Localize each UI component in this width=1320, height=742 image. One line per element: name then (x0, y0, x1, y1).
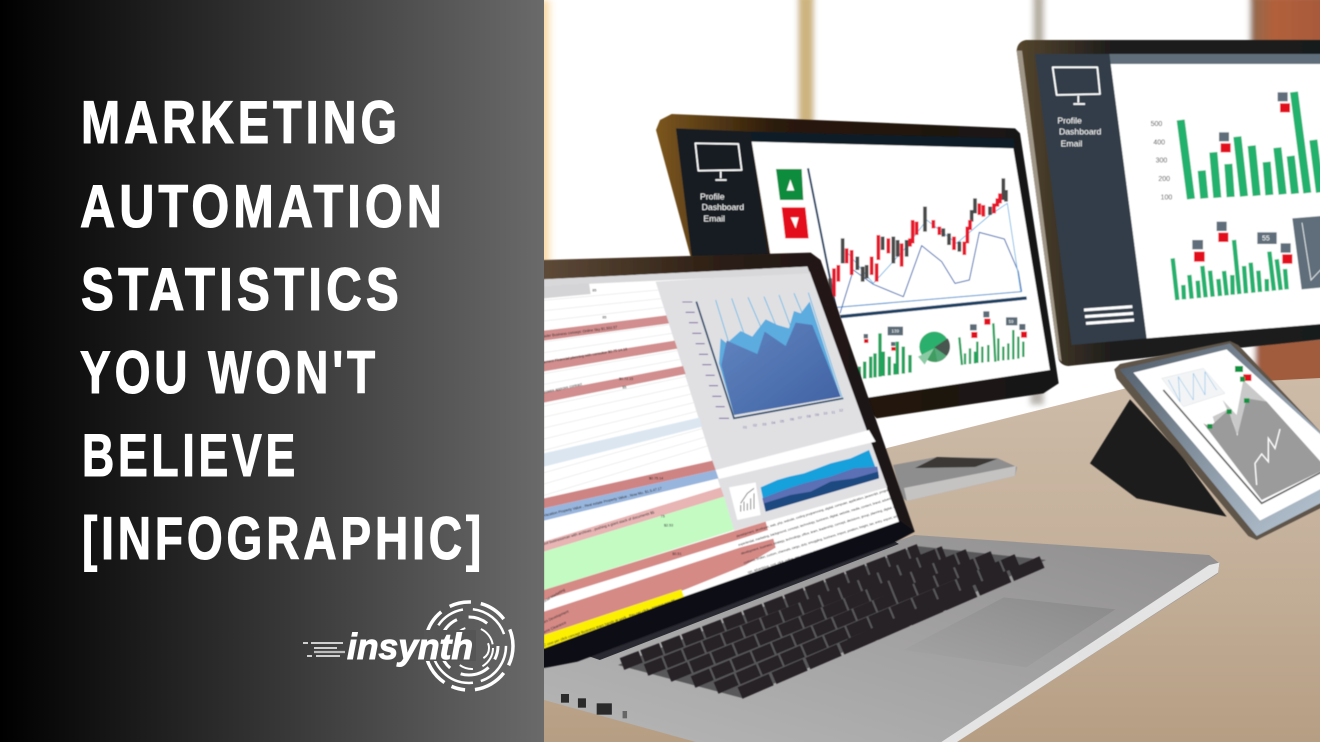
tablet stand (1090, 399, 1227, 517)
tablet tags (1207, 366, 1251, 429)
ports (561, 694, 627, 718)
icon: hamburger lines (1084, 307, 1134, 323)
grey and red tags (1192, 92, 1292, 264)
logo concentric rings (425, 602, 513, 690)
desk surface (544, 378, 1320, 742)
lower green bar chart (1173, 240, 1287, 300)
front edge highlight (941, 563, 1219, 742)
pie chart (918, 332, 950, 365)
phone lying on desk (893, 457, 1017, 501)
logo wordmark: insynth (347, 626, 473, 667)
line series (840, 203, 1022, 313)
monitor 2 bezel (656, 114, 1059, 418)
right bar tags: 59 (1009, 319, 1014, 324)
x axis labels: 06 (790, 418, 794, 422)
logo: insynth (303, 602, 513, 690)
sheet left grey header (544, 283, 591, 298)
sheet header strip (544, 267, 810, 286)
tablet bezel (1119, 343, 1320, 536)
x axis labels: 05 (780, 419, 784, 423)
candlestick chart axis (808, 168, 1027, 317)
monitor 3 bezel (1017, 40, 1320, 366)
keyword list: development, developer, web, php, website, coding programming, digital, computer, application, javascript, programming, code, html (736, 480, 914, 538)
grey inset panel (1292, 215, 1320, 289)
tablet mini grid chart (1162, 368, 1225, 407)
chart axis labels (1151, 121, 1172, 201)
tablet white screen (1133, 349, 1320, 521)
spreadsheet text: $2.53 (664, 524, 673, 528)
x axis labels: 04 (771, 421, 775, 425)
tablet axis (1163, 390, 1320, 503)
x axis labels: 08 (807, 414, 811, 418)
spreadsheet text: 85 (592, 289, 596, 293)
tablet white line chart (1255, 429, 1280, 485)
x axis labels: 09 (815, 413, 819, 417)
monitor 3 top band (1109, 54, 1320, 64)
tablet light mountain (1213, 380, 1267, 440)
chart axis labels: 100 (1161, 194, 1172, 201)
keyword list: customs, broker, custom, channels, cargo, duty, smuggling, business, import, position, freight, tax, entry, export, world, shipping (743, 509, 914, 565)
laptop lid and screen (542, 253, 919, 668)
keyword list: development, business, strategy, technology, office, team, leadership, concept, decisions, group, planning, digital, creative, media (740, 499, 915, 556)
tablet on stand (1090, 341, 1320, 540)
tablet dark mountain (1203, 398, 1320, 500)
spreadsheet text: ies Development (543, 610, 569, 624)
spreadsheet text: ocial Marketing (543, 588, 566, 604)
sidebar menu text: Profile (1057, 115, 1082, 125)
title: BELIEVE (82, 422, 299, 489)
left gradient panel (0, 0, 544, 742)
left green bar chart (859, 333, 910, 379)
spreadsheet text: $0.75.14 (649, 476, 663, 480)
left bar tags (864, 327, 903, 351)
highlighted spreadsheet rows (544, 315, 776, 648)
title: STATISTICS (81, 256, 403, 323)
x axis labels: 07 (798, 416, 802, 420)
monitor 2 sidebar (676, 128, 768, 257)
sheet grid lines (544, 290, 707, 495)
chart axis labels: 400 (1153, 139, 1165, 146)
spreadsheet text: ams Clearance (543, 621, 567, 634)
icon: monitor (1053, 67, 1100, 104)
spreadsheet text: Vacation Property Value , Real estate Property Value , Now Mo. $1.5.47.17 (543, 486, 662, 518)
white strip behind lower chart (716, 430, 876, 479)
lid (542, 253, 915, 668)
spreadsheet text (542, 289, 681, 648)
sidebar menu text: Email (703, 214, 725, 224)
sidebar menu text (700, 191, 744, 224)
hinge shelf (575, 540, 899, 660)
keyboard well (618, 546, 1046, 698)
spreadsheet text: C cost per click concept Business team hands at work , Pay per click - internet mar $5 (543, 599, 676, 648)
x axis labels: 03 (762, 423, 766, 427)
title (80, 89, 485, 572)
keyword list (736, 489, 898, 574)
photo background: window and wall (540, 0, 1320, 470)
spreadsheet text: ool businessman with archives , pushing a giant stack of documents $5 (543, 510, 655, 546)
title: MARKETING (81, 89, 401, 156)
x axis labels: 11 (831, 410, 835, 414)
laptop base (544, 535, 1219, 742)
monitor 3 sidebar (1035, 54, 1147, 345)
trackpad (903, 597, 1115, 667)
keyword list: experiential, marketing, background, concept, technology, business, digital, website, media, content, brand, advertising, online, internet (738, 488, 919, 547)
right green bar chart (959, 323, 1023, 365)
monitor 2: candlestick dashboard (656, 114, 1059, 418)
spreadsheet text: $0.72.15 (619, 377, 633, 381)
icon: monitor (695, 143, 742, 180)
area chart axes and ticks (682, 293, 843, 418)
down button (782, 207, 809, 238)
x axis labels: 02 (753, 424, 757, 428)
stacked area chart (761, 450, 879, 512)
left bar tags: 139 (891, 329, 900, 334)
title: [INFOGRAPHIC] (82, 505, 485, 572)
monitor 3 bezel edge highlight (1017, 51, 1062, 362)
x axis labels: 12 (839, 409, 843, 413)
monitor 2 top band (750, 132, 1015, 148)
keyboard (618, 546, 1046, 698)
spreadsheet text: $0.51 (672, 552, 681, 556)
spreadsheet text: nowee approve contract (543, 382, 582, 394)
spreadsheet text: ement Financial planning with consultor $0.75 14.18 (544, 347, 627, 364)
main green bar chart (1181, 92, 1320, 199)
x axis labels (743, 409, 843, 429)
sidebar menu text (1057, 115, 1102, 148)
monitor 3 white area (1111, 64, 1320, 338)
tooltip 55: 55 (1262, 236, 1270, 243)
mini chart icon tile (729, 482, 761, 520)
spreadsheet text: 75 (661, 515, 665, 519)
up button (776, 169, 803, 200)
spreadsheet text: $5 (622, 385, 626, 389)
right bar tags (970, 311, 1027, 338)
sidebar menu text: Email (1061, 138, 1082, 148)
chart axis labels: 300 (1156, 158, 1167, 165)
title: AUTOMATION (80, 173, 446, 240)
notch (1077, 628, 1120, 662)
spacebar (850, 598, 957, 645)
screen sheet (544, 267, 899, 648)
x axis labels: 10 (823, 412, 827, 416)
blue area chart (719, 302, 841, 415)
sidebar menu text: Profile (700, 191, 725, 201)
monitor 2 white chart area (752, 142, 1050, 398)
x axis labels: 01 (743, 425, 747, 429)
spreadsheet text: 85 (602, 315, 606, 319)
candlesticks (830, 178, 1006, 297)
chart axis labels: 500 (1151, 121, 1162, 128)
title: YOU WON'T (80, 339, 379, 406)
sidebar menu text: Dashboard (1059, 126, 1102, 136)
lid bottom bezel (542, 520, 915, 668)
sidebar menu text: Dashboard (702, 202, 744, 212)
right grey chart panel (656, 272, 887, 531)
base body (544, 535, 1219, 742)
logo speed lines (303, 643, 345, 656)
keyword list: cpc, advertising, cost, click, online, per, concept, digital, ads, web, process, internet, search, pay, marketing, ranking, network (747, 519, 915, 574)
monitor 3: bar chart dashboard (1017, 40, 1320, 366)
spreadsheet text: ader Business concept: Online Sky $1,502.57 (544, 325, 618, 338)
logo wordmark backing (424, 630, 476, 661)
tooltip 55 (1257, 232, 1277, 244)
chart axis labels: 200 (1158, 176, 1170, 183)
tablet shell (1114, 341, 1320, 540)
keyboard keys (622, 550, 1042, 693)
